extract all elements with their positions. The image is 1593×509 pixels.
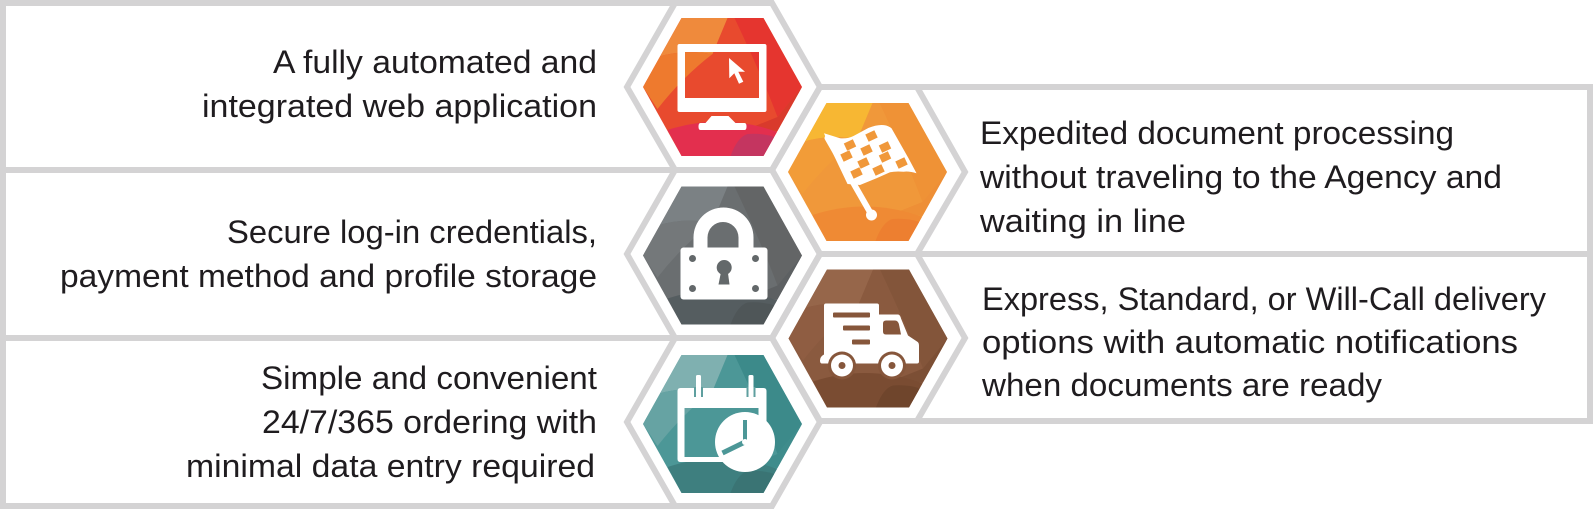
text: document processing [979, 115, 1502, 239]
panel: ordering [186, 354, 802, 494]
panel: document processing [788, 102, 1502, 242]
text: document processing: waiting in line [979, 203, 1186, 239]
text: document processing: without traveling to the Agency and [979, 159, 1502, 195]
text: ordering: minimal data entry required [186, 448, 595, 484]
text: document processing: Expedited document processing [980, 115, 1454, 151]
text: web application: A fully automated and [273, 44, 597, 80]
text: ordering: 24/7/365 ordering with [262, 404, 597, 440]
panel: secure credentials [60, 186, 802, 326]
text: web application [202, 44, 597, 124]
icon: padlock hexagon [642, 186, 802, 326]
text: delivery options [981, 281, 1547, 403]
text: ordering: Simple and convenient [261, 360, 597, 396]
panel: delivery options [788, 268, 1547, 408]
text: web application: integrated web application [202, 88, 597, 124]
icon: checkered flag hexagon [788, 102, 948, 242]
icon: monitor hexagon [642, 17, 802, 157]
text: ordering [186, 360, 597, 484]
text: secure credentials [60, 214, 597, 294]
text: secure credentials: Secure log-in credentials, [227, 214, 597, 250]
text: secure credentials: payment method and profile storage [60, 258, 597, 294]
text: delivery options: Express, Standard, or Will-Call delivery [982, 281, 1547, 317]
icon: calendar and clock hexagon [642, 354, 802, 494]
text: delivery options: when documents are ready [981, 367, 1383, 403]
panel: web application [202, 17, 802, 157]
icon: delivery truck hexagon [788, 268, 948, 408]
text: delivery options: options with automatic notifications [982, 324, 1518, 360]
